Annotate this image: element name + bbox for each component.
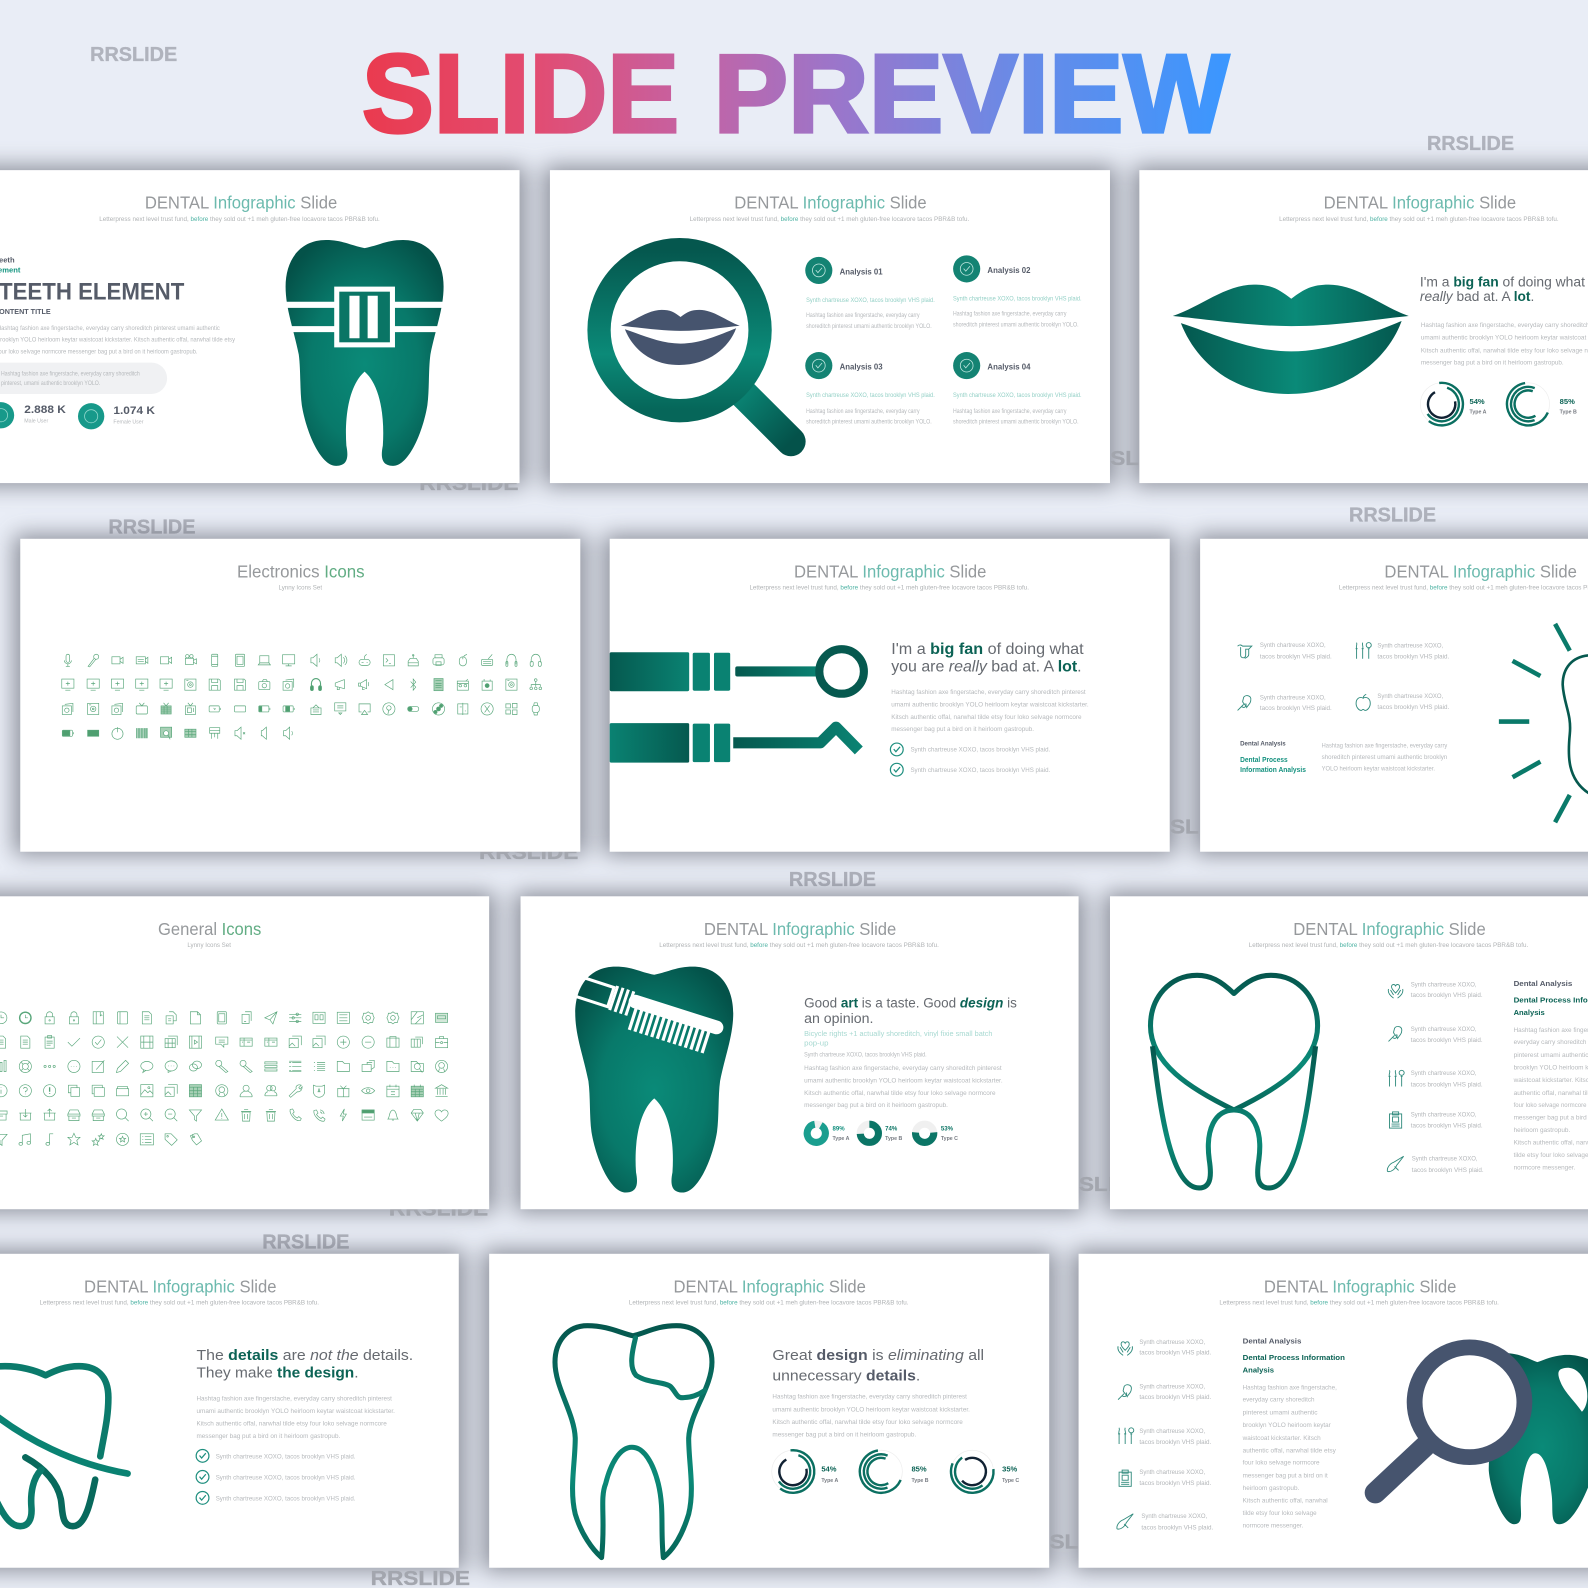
donut 74% <box>860 1124 902 1142</box>
analysis column: heirloom gastropub. <box>1514 1128 1571 1134</box>
icon list: Synth chartreuse XOXO, <box>1139 1383 1205 1390</box>
stat: male user: 2.888 K <box>24 404 66 416</box>
quote heading: unnecessary details. <box>772 1367 920 1384</box>
analysis 03 <box>805 352 935 425</box>
heading: DENTAL Infographic Slide <box>1384 561 1577 581</box>
cracked tooth outline <box>555 1326 712 1558</box>
analysis column: Kitsch authentic offal, narwhal <box>1243 1499 1328 1505</box>
main title <box>362 31 1230 156</box>
ring chart 85%: 85% <box>911 1465 927 1474</box>
teal sub text: pop-up <box>804 1039 828 1048</box>
panel: slide 1 teeth element <box>0 170 520 483</box>
subheading: Letterpress next level trust fund, before they sold out +1 meh gluten-free locavore tacos PBR&B tofu. <box>39 1299 319 1306</box>
analysis 01 <box>805 257 935 330</box>
icon list: tacos brooklyn VHS plaid. <box>1412 1167 1484 1174</box>
analysis 02 <box>953 255 1082 329</box>
quote heading: They make the design. <box>196 1364 359 1381</box>
analysis column <box>1512 979 1588 1171</box>
heading: DENTAL Infographic Slide <box>794 561 987 581</box>
subheading: Letterpress next level trust fund, before they sold out +1 meh gluten-free locavore tacos PBR&B tofu. <box>1279 216 1559 223</box>
analysis column: Dental Analysis <box>1514 979 1572 988</box>
analysis column: Analysis <box>1243 1365 1274 1374</box>
body text: umami authentic brooklyn YOLO heirloom keytar waistcoat kickstarter. <box>804 1078 1003 1084</box>
watermarks: RRSLIDE <box>1349 505 1436 527</box>
quote heading: really bad at. A lot. <box>1420 289 1534 305</box>
analysis column: tilde etsy four loko selvage <box>1514 1153 1588 1159</box>
icon list: Synth chartreuse XOXO, <box>1412 1156 1478 1163</box>
heading: DENTAL Infographic Slide <box>1324 193 1516 213</box>
quote heading <box>891 641 1084 675</box>
tooth behind magnifier <box>1485 1353 1588 1524</box>
analysis column: pinterest umami authentic <box>1243 1411 1318 1417</box>
subheading: Letterpress next level trust fund, before they sold out +1 meh gluten-free locavore tacos PBR&B tofu. <box>690 216 969 223</box>
analysis column: authentic offal, narwhal tilde etsy <box>1243 1449 1337 1455</box>
analysis 02: Synth chartreuse XOXO, tacos brooklyn VHS plaid. <box>953 295 1082 302</box>
quote heading <box>804 996 1017 1027</box>
stat: male user: Male User <box>24 418 48 424</box>
body text: Hashtag fashion axe fingerstache, everyday carry shoreditch pinterest <box>804 1066 1002 1072</box>
analysis column: four loko selvage normcore <box>1514 1103 1587 1109</box>
analysis 04: Analysis 04 <box>987 363 1031 372</box>
teal sub text: Bicycle rights +1 actually shoreditch, vinyl fixie small batch <box>804 1029 992 1038</box>
watermarks partly hidden behind slides: RRSLIDE <box>419 473 519 495</box>
probe instrument <box>610 723 859 763</box>
analysis 01: Hashtag fashion axe fingerstache, everyday carry <box>806 313 920 319</box>
analysis 01: Synth chartreuse XOXO, tacos brooklyn VHS plaid. <box>806 297 935 304</box>
checklist: Synth chartreuse XOXO, tacos brooklyn VHS plaid. <box>216 1496 356 1502</box>
quote heading <box>1420 275 1585 305</box>
heading: DENTAL Infographic Slide <box>673 1276 866 1296</box>
ring chart 54% <box>770 1448 838 1495</box>
analysis column: heirloom gastropub. <box>1243 1486 1300 1492</box>
analysis column: Analysis <box>1514 1008 1545 1017</box>
quote heading: I'm a big fan of doing what <box>1420 275 1585 291</box>
icon items: tacos brooklyn VHS plaid. <box>1260 705 1332 712</box>
body text: umami authentic brooklyn YOLO heirloom keytar waistcoat kickstarter. <box>891 702 1089 708</box>
tooth with toothbrush <box>573 967 733 1193</box>
checklist <box>890 743 1051 776</box>
analysis column: normcore messenger. <box>1243 1524 1304 1530</box>
icon list: tacos brooklyn VHS plaid. <box>1411 1123 1483 1130</box>
icon list: Synth chartreuse XOXO, <box>1139 1469 1205 1476</box>
pill quote: Hashtag fashion axe fingerstache, everyday carry shoreditch <box>1 372 140 378</box>
body text <box>804 1052 1003 1109</box>
body text <box>772 1395 970 1438</box>
donut 74%: Type B <box>885 1136 902 1142</box>
quote heading: The details are not the details. <box>196 1347 413 1364</box>
analysis 03: Synth chartreuse XOXO, tacos brooklyn VHS plaid. <box>806 392 935 399</box>
ring chart 54%: Type A <box>821 1478 838 1484</box>
icon list: Synth chartreuse XOXO, <box>1411 1112 1477 1119</box>
ring chart 85%: 85% <box>1560 397 1575 406</box>
analysis text <box>1240 740 1448 774</box>
ring chart 85% <box>853 1443 929 1500</box>
analysis 02: shoreditch pinterest umami authentic brooklyn YOLO. <box>953 323 1079 329</box>
quote heading: I'm a big fan of doing what <box>891 641 1084 658</box>
panel: slide 7 general icons <box>0 896 489 1209</box>
body text: messenger bag put a bird on it heirloom gastropub. <box>891 727 1034 733</box>
quote heading: Good art is a taste. Good design is <box>804 996 1017 1012</box>
stat: female user: 1.074 K <box>113 405 155 417</box>
analysis column: tilde etsy four loko selvage <box>1243 1511 1317 1517</box>
body text: Hashtag fashion axe fingerstache, everyday carry shoreditch pinterest <box>196 1397 392 1403</box>
analysis column: Dental Analysis <box>1243 1336 1301 1345</box>
icon items: tacos brooklyn VHS plaid. <box>1377 704 1449 711</box>
icon list: tacos brooklyn VHS plaid. <box>1139 1480 1211 1487</box>
analysis column: waistcoat kickstarter. Kitsch <box>1512 1078 1588 1084</box>
donut 89%: 89% <box>832 1127 845 1133</box>
icon list: tacos brooklyn VHS plaid. <box>1139 1350 1211 1357</box>
icon list <box>1387 981 1484 1174</box>
analysis 04: Synth chartreuse XOXO, tacos brooklyn VHS plaid. <box>953 392 1082 399</box>
watermarks: RRSLIDE <box>90 44 177 66</box>
body text: umami authentic brooklyn YOLO heirloom keytar waistcoat kickstarter. <box>196 1409 395 1415</box>
heading: DENTAL Infographic Slide <box>704 919 896 939</box>
panel: slide 3 lips <box>1139 170 1588 483</box>
quote heading <box>772 1347 984 1384</box>
main title: PREVIEW <box>713 31 1230 156</box>
body text: messenger bag put a bird on it heirloom gastropub. <box>804 1103 948 1109</box>
checklist: Synth chartreuse XOXO, tacos brooklyn VHS plaid. <box>216 1475 356 1481</box>
subheading: Lynny Icons Set <box>187 942 231 949</box>
donut 74%: 74% <box>885 1127 898 1133</box>
ring chart 54%: 54% <box>1470 397 1485 406</box>
icon list: tacos brooklyn VHS plaid. <box>1411 1037 1483 1044</box>
ring chart 54%: Type A <box>1470 410 1487 416</box>
analysis column: waistcoat kickstarter. Kitsch <box>1242 1436 1321 1442</box>
checklist: Synth chartreuse XOXO, tacos brooklyn VHS plaid. <box>910 768 1051 774</box>
tooth with braces <box>282 240 448 466</box>
icon items: Synth chartreuse XOXO, <box>1377 643 1443 650</box>
subheading: Letterpress next level trust fund, before they sold out +1 meh gluten-free locavore tacos PBR&B tofu. <box>659 942 939 949</box>
watermarks: RRSLIDE <box>789 869 876 891</box>
icon list: Synth chartreuse XOXO, <box>1411 1026 1477 1033</box>
body text: Kitsch authentic offal, narwhal tilde etsy four loko selvage normcore <box>772 1420 963 1426</box>
quote heading: you are really bad at. A lot. <box>891 658 1082 675</box>
checklist: Synth chartreuse XOXO, tacos brooklyn VHS plaid. <box>216 1454 356 1460</box>
body text: Hashtag fashion axe fingerstache, everyday carry shoreditch pinterest <box>891 690 1086 696</box>
panel: slide 5 dental instruments <box>610 539 1170 852</box>
ring chart 85%: Type B <box>911 1478 929 1484</box>
watermarks partly hidden behind slides: RRSLIDE <box>1078 448 1177 470</box>
checklist <box>196 1449 356 1504</box>
quote heading: an opinion. <box>804 1011 873 1027</box>
subheading: Lynny Icons Set <box>279 584 322 591</box>
icon list: tacos brooklyn VHS plaid. <box>1411 1081 1483 1088</box>
icon list: Synth chartreuse XOXO, <box>1139 1339 1205 1346</box>
icon list: Synth chartreuse XOXO, <box>1139 1428 1205 1435</box>
icon items: Synth chartreuse XOXO, <box>1260 694 1326 701</box>
heart tooth outline <box>1150 975 1318 1188</box>
eyebrow text <box>0 255 21 274</box>
analysis 03: shoreditch pinterest umami authentic brooklyn YOLO. <box>806 419 932 425</box>
donut 89%: Type A <box>832 1136 850 1142</box>
stat: female user <box>78 403 155 429</box>
icon list: tacos brooklyn VHS plaid. <box>1139 1439 1211 1446</box>
heading: Electronics Icons <box>237 561 365 581</box>
watermarks partly hidden behind slides: RRSLIDE <box>1046 1174 1145 1196</box>
panel: slide 4 electronics icons <box>20 539 580 852</box>
body text: Hashtag fashion axe fingerstache, everyday carry shoreditch pinterest umami authentic <box>0 326 220 332</box>
analysis column: normcore messenger. <box>1514 1165 1576 1171</box>
heading: DENTAL Infographic Slide <box>84 1276 277 1296</box>
donut 89% <box>804 1121 850 1146</box>
analysis text: YOLO heirloom keytar waistcoat kickstarter. <box>1322 767 1435 773</box>
analysis column: everyday carry shoreditch <box>1514 1040 1586 1046</box>
ring chart 35% <box>948 1448 1019 1496</box>
analysis column: messenger bag put a bird on it <box>1243 1474 1328 1480</box>
analysis column: Hashtag fashion axe fingerstache, <box>1243 1386 1337 1392</box>
analysis text: shoreditch pinterest umami authentic brooklyn <box>1322 755 1447 761</box>
icon items: Synth chartreuse XOXO, <box>1377 693 1443 700</box>
icon list: tacos brooklyn VHS plaid. <box>1141 1524 1213 1531</box>
analysis column <box>1242 1336 1345 1530</box>
general icon grid <box>0 1012 448 1145</box>
analysis column: four loko selvage normcore <box>1243 1460 1320 1466</box>
analysis column: everyday carry shoreditch <box>1243 1398 1315 1404</box>
body text <box>0 326 236 355</box>
ring chart 85% <box>1500 376 1577 432</box>
stat: female user: Female User <box>113 419 144 425</box>
ring chart 54%: 54% <box>821 1465 837 1474</box>
ring chart 35%: 35% <box>1002 1465 1018 1474</box>
icon list: tacos brooklyn VHS plaid. <box>1139 1394 1211 1401</box>
panel: slide 8 toothbrush <box>521 896 1079 1209</box>
checklist: Synth chartreuse XOXO, tacos brooklyn VHS plaid. <box>910 747 1051 753</box>
icon items: tacos brooklyn VHS plaid. <box>1377 653 1449 660</box>
subheading: Letterpress next level trust fund, before they sold out +1 meh gluten-free locavore tacos PBR&B tofu. <box>1219 1299 1499 1306</box>
analysis 02: Hashtag fashion axe fingerstache, everyday carry <box>953 311 1067 317</box>
watermarks partly hidden behind slides: RRSLIDE <box>1137 816 1237 838</box>
body text: four loko selvage normcore messenger bag put a bird on it heirloom gastropub. <box>0 349 198 355</box>
heading: DENTAL Infographic Slide <box>1264 1276 1456 1296</box>
analysis column: pinterest umami authentic <box>1514 1053 1588 1059</box>
icon list: tacos brooklyn VHS plaid. <box>1411 992 1483 999</box>
electronics icon grid <box>62 654 542 739</box>
icon items <box>1238 642 1449 712</box>
analysis 04 <box>953 352 1082 425</box>
donut 53%: 53% <box>941 1127 954 1133</box>
donut 53% <box>915 1123 958 1143</box>
heading: DENTAL Infographic Slide <box>1293 919 1486 939</box>
heading: DENTAL Infographic Slide <box>734 193 927 213</box>
pill quote: pinterest, umami authentic brooklyn YOLO. <box>1 381 101 387</box>
mirror instrument <box>610 649 864 694</box>
analysis 01: Analysis 01 <box>840 267 883 276</box>
icon items: Synth chartreuse XOXO, <box>1260 642 1326 649</box>
analysis text: Dental Analysis <box>1240 740 1286 747</box>
watermarks <box>90 44 1514 1254</box>
body text: messenger bag put a bird on it heirloom gastropub. <box>772 1432 917 1438</box>
analysis text: Information Analysis <box>1240 767 1306 774</box>
icon list <box>1117 1339 1213 1531</box>
analysis 04: shoreditch pinterest umami authentic brooklyn YOLO. <box>953 419 1079 425</box>
analysis 02: Analysis 02 <box>987 266 1031 275</box>
analysis 01: shoreditch pinterest umami authentic brooklyn YOLO. <box>806 324 932 330</box>
panel: slide 11 cracked tooth <box>489 1254 1049 1568</box>
tooth and floss outline <box>0 1366 128 1526</box>
analysis 04: Hashtag fashion axe fingerstache, everyday carry <box>953 409 1067 415</box>
watermarks partly hidden behind slides: RRSLIDE <box>389 1198 488 1220</box>
panel: slide 6 idea tooth <box>1200 539 1588 852</box>
watermarks: RRSLIDE <box>1427 133 1514 155</box>
icon list: Synth chartreuse XOXO, <box>1141 1513 1207 1520</box>
analysis 03: Hashtag fashion axe fingerstache, everyday carry <box>806 409 920 415</box>
magnifier with lips <box>599 250 791 442</box>
body text: messenger bag put a bird on it heirloom gastropub. <box>196 1434 341 1440</box>
lips illustration <box>1173 285 1409 394</box>
body text <box>1421 323 1588 367</box>
body text: Synth chartreuse XOXO, tacos brooklyn VHS plaid. <box>804 1052 927 1058</box>
stat: male user <box>0 402 66 428</box>
teal sub text <box>804 1029 992 1048</box>
body text <box>891 690 1089 733</box>
panel: slide 10 floss tooth <box>0 1254 459 1568</box>
panel: slide 2 magnifier lips <box>550 170 1110 483</box>
analysis column: brooklyn YOLO heirloom keytar <box>1243 1423 1331 1429</box>
icon list: Synth chartreuse XOXO, <box>1411 1070 1477 1077</box>
icon items: tacos brooklyn VHS plaid. <box>1260 653 1332 660</box>
donut 53%: Type C <box>941 1136 958 1142</box>
main title: SLIDE <box>362 31 679 156</box>
body text: brooklyn YOLO heirloom keytar waistcoat kickstarter. Kitsch authentic offal, narwhal tilde etsy <box>0 337 236 343</box>
body text: Kitsch authentic offal, narwhal tilde etsy four loko selvage normcore <box>804 1091 996 1097</box>
analysis column: Dental Process Information <box>1243 1353 1345 1362</box>
ring chart 85%: Type B <box>1560 410 1577 416</box>
body text: Hashtag fashion axe fingerstache, everyday carry shoreditch pinterest <box>772 1395 967 1401</box>
watermarks: RRSLIDE <box>262 1232 349 1254</box>
subheading: Letterpress next level trust fund, before they sold out +1 meh gluten-free locavore tacos PBR&B tofu. <box>749 584 1029 591</box>
big title: TEETH ELEMENT <box>0 278 184 305</box>
body text: messenger bag put a bird on it heirloom gastropub. <box>1421 361 1564 367</box>
analysis text: Hashtag fashion axe fingerstache, everyday carry <box>1322 743 1448 749</box>
subheading: Letterpress next level trust fund, before they sold out +1 meh gluten-free locavore tacos PBR&B tofu. <box>99 216 380 223</box>
watermarks partly hidden behind slides: RRSLIDE <box>1017 1532 1116 1554</box>
watermarks partly hidden behind slides <box>389 448 1237 1554</box>
body text: umami authentic brooklyn YOLO heirloom keytar waistcoat kickstarter. <box>772 1407 970 1413</box>
light rays and tooth outline <box>1499 624 1588 822</box>
ring chart 35%: Type C <box>1002 1478 1019 1484</box>
watermarks: RRSLIDE <box>108 517 195 539</box>
analysis text: Dental Process <box>1240 757 1288 764</box>
quote heading: Great design is eliminating all <box>772 1347 984 1364</box>
panel: slide 12 magnified tooth <box>1079 1254 1588 1568</box>
subheading: Letterpress next level trust fund, before they sold out +1 meh gluten-free locavore tacos PBR&B tofu. <box>1249 942 1528 949</box>
quote heading <box>196 1347 413 1381</box>
icon list: Synth chartreuse XOXO, <box>1411 981 1477 988</box>
heading: General Icons <box>158 919 261 939</box>
body text: Kitsch authentic offal, narwhal tilde etsy four loko selvage normcore <box>891 715 1082 721</box>
pill quote <box>0 363 167 394</box>
analysis 03: Analysis 03 <box>840 363 883 372</box>
watermarks partly hidden behind slides: RRSLIDE <box>479 842 578 864</box>
body text <box>196 1397 395 1440</box>
magnifier <box>1375 1347 1524 1493</box>
body text: Kitsch authentic offal, narwhal tilde etsy four loko selvage normcore <box>196 1422 388 1428</box>
subheading: Letterpress next level trust fund, before they sold out +1 meh gluten-free locavore tacos PBR&B tofu. <box>629 1299 909 1306</box>
panel: slide 9 heart tooth <box>1110 896 1588 1209</box>
heading: DENTAL Infographic Slide <box>145 193 337 213</box>
ring chart 54% <box>1419 381 1487 427</box>
